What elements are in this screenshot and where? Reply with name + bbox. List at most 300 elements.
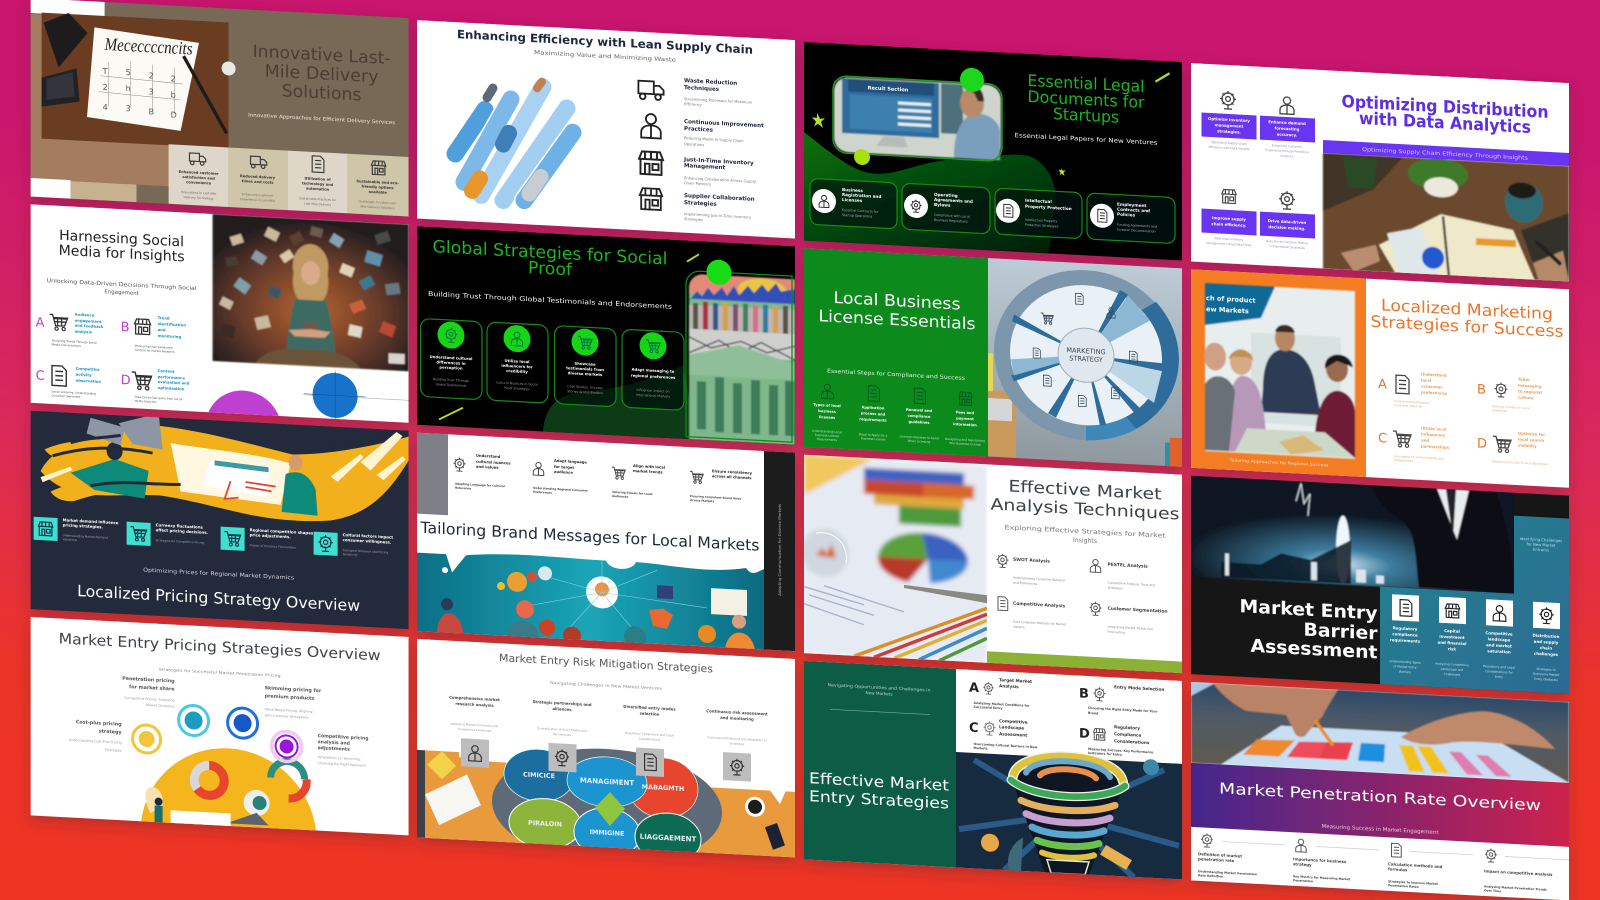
slide: Market Entry Barrier Assessment	[1191, 476, 1569, 695]
frame and green circle	[686, 258, 792, 442]
photo banner text: ch of product	[1206, 294, 1256, 305]
strategy cards: testimonials from	[566, 365, 604, 372]
teal barrier panel: and market	[1486, 642, 1512, 649]
icon tiles	[461, 738, 751, 782]
desk props	[988, 353, 1182, 467]
item C: activity	[76, 372, 92, 378]
top items: cultural nuances	[476, 460, 511, 466]
title: License Essentials	[819, 306, 975, 333]
technique items: Data Collection Methods for Market	[1013, 620, 1067, 627]
item A: Analyzing Trends Through Social	[52, 338, 97, 345]
title: Optimizing Distribution	[1342, 92, 1548, 123]
illustration: desk with overlapping circles: PIRALOIN	[528, 819, 562, 829]
just-in-time item: Enhancing Collaboration Across Supply	[684, 176, 757, 184]
strategy headings: Regulatory Compliance and Legal	[625, 731, 674, 737]
teal barrier panel: Entry	[1495, 675, 1503, 679]
teal barrier panel: and financial	[1438, 640, 1467, 646]
illustration: desk with overlapping circles	[417, 739, 795, 875]
technique items: and Preferences	[1013, 581, 1038, 586]
photo: wooden desk with handwritten note: 2	[149, 71, 154, 81]
strategy headings: Competitive Landscape	[457, 727, 492, 733]
item B: B	[121, 320, 130, 336]
item C: Landscape	[999, 724, 1024, 731]
pricing factor cards: Variations	[63, 537, 77, 542]
pricing factor cards: consumer willingness.	[343, 537, 392, 545]
green left panel	[804, 661, 956, 868]
document cards: Startup Operations	[842, 213, 873, 219]
just-in-time item: Management	[684, 163, 725, 171]
penetration pricing text	[122, 676, 175, 709]
item A: Analysis	[999, 683, 1019, 689]
item D	[122, 369, 190, 404]
slide: Localized Pricing Strategy Overview	[31, 407, 409, 630]
purple benefit cards: accuracy.	[1277, 132, 1298, 138]
item C: C	[1378, 431, 1387, 447]
strategy cards: Utilize local	[505, 358, 529, 364]
feature cards: times and costs	[242, 179, 274, 185]
item A: Consumer Behavior	[1394, 403, 1423, 409]
cost-plus text: Understanding Cost-Plus Pricing	[69, 738, 122, 745]
metric items: Understanding Market Penetration	[1198, 869, 1257, 876]
item A: Audience	[75, 312, 95, 318]
strategy cards: differences in	[436, 359, 466, 366]
illustration: target and binoculars on yellow dome	[141, 744, 317, 900]
document cards: Licenses	[842, 197, 863, 203]
item D: Indicators for Entry	[1088, 751, 1122, 757]
green left panel: When Licensing	[908, 439, 931, 444]
green left panel: Application	[862, 405, 885, 411]
title: Media for Insights	[59, 243, 185, 265]
photo banner text	[1206, 294, 1256, 316]
feature cards: Innovations in Last-Mile	[181, 190, 216, 196]
illustration: supply chain capsules	[455, 77, 573, 204]
title: Documents for	[1027, 87, 1145, 112]
photo: wooden desk with handwritten note: 2	[103, 83, 108, 92]
purple benefit cards: Drive data-driven	[1268, 218, 1306, 225]
item D: D	[1079, 726, 1090, 742]
feature cards: Sustainable Practices for	[299, 196, 337, 202]
technique items: PESTEL Analysis	[1108, 562, 1148, 570]
item D: D	[121, 373, 131, 389]
penetration pricing text: for market share	[129, 684, 175, 693]
title: Market Entry Pricing Strategies Overview	[59, 631, 381, 664]
item B: B	[1477, 382, 1486, 398]
item B: Audiences	[1492, 408, 1507, 413]
item C: Competitor	[76, 366, 100, 372]
title	[818, 287, 976, 333]
item C	[969, 717, 1038, 753]
technique items: Integrating Market Trends and	[1108, 625, 1153, 631]
title: Market Entry Risk Mitigation Strategies	[499, 652, 713, 676]
strategy headings: research analysis	[455, 701, 494, 708]
item B: to regional	[1518, 389, 1542, 395]
item A: Target Market	[999, 677, 1032, 684]
purple benefit cards: chain efficiency.	[1211, 221, 1247, 228]
penetration pricing text: Penetration pricing	[122, 676, 175, 685]
purple benefit cards	[1202, 90, 1315, 251]
right vertical strip	[764, 451, 795, 652]
title	[1370, 295, 1564, 341]
item A	[1378, 369, 1448, 410]
technique items: Understanding Consumer Behavior	[1013, 576, 1066, 582]
feature cards: technology and	[302, 181, 334, 187]
title	[1240, 596, 1378, 663]
feature cards: available	[368, 190, 387, 195]
strategy headings	[449, 695, 768, 747]
competitive pricing text: analysis and	[318, 739, 350, 747]
item B	[1477, 374, 1542, 415]
strategy cards: regional preferences	[631, 373, 676, 380]
item A: and feedback	[75, 323, 104, 329]
waste reduction item: Waste Reduction	[684, 78, 737, 87]
photo: hand marking bar chart	[1191, 682, 1569, 783]
green left panel: Common Mistakes to Avoid	[899, 434, 939, 440]
slide: Optimizing Distribution with Data Analytics	[1191, 63, 1569, 283]
title	[1029, 74, 1144, 126]
teal barrier panel: landscape	[1488, 636, 1511, 643]
slide: Localized Marketing Strategies for Success	[1191, 269, 1569, 488]
photo: wooden desk with handwritten note: h	[126, 84, 131, 93]
technique items: SWOT Analysis	[1013, 557, 1050, 565]
teal barrier panel: Overcome Market	[1533, 672, 1560, 677]
pricing factor cards: Impact of Currency Fluctuations	[250, 543, 296, 550]
subtitle: Maximizing Value and Minimizing Waste	[534, 50, 677, 64]
item C: C	[36, 369, 45, 384]
title: Local Business	[833, 288, 960, 314]
purple benefit cards: Experience through Predictive	[1265, 148, 1309, 154]
teal barrier panel: requirements	[1390, 637, 1421, 644]
title: Analysis Techniques	[990, 494, 1180, 523]
top items	[454, 453, 753, 505]
feature cards: Challenges in Urban Last-	[358, 199, 397, 205]
photo: woman surrounded by social images	[213, 214, 409, 371]
teal barrier panel: Identifying Challenges	[1520, 536, 1562, 543]
green left panel: compliance	[908, 414, 931, 419]
green left panel: requirements	[859, 417, 887, 423]
photo banner text: ew Markets	[1206, 305, 1249, 315]
supplier collaboration item: Strategies	[684, 200, 717, 208]
item C: Competitive	[999, 718, 1028, 725]
photo: financial charts with crystal ball and pen	[801, 454, 987, 663]
strategy cards: Building Trust Through	[433, 377, 469, 383]
title: Mile Delivery	[265, 61, 379, 87]
illustration: megaphone and analysts on yellow brush	[41, 407, 409, 527]
green left panel: information	[953, 422, 977, 427]
feature cards: convenience	[186, 180, 212, 186]
document cards: Operating	[934, 192, 958, 198]
pricing factor cards: price adjustments.	[250, 532, 291, 539]
subtitle: Essential Legal Papers for New Ventures	[1014, 132, 1158, 147]
item C	[36, 364, 101, 400]
green left panel: Understanding Local	[812, 429, 842, 434]
item A: analysis	[75, 329, 93, 335]
green left panel: Steps to Apply for a	[859, 432, 888, 438]
green left panel: licenses	[819, 415, 835, 420]
item D: performance	[158, 374, 185, 380]
photo: wooden desk with handwritten note: Mececcccncits	[104, 34, 193, 59]
item C: Leveraging Local Partnerships and	[1394, 454, 1444, 461]
item D: visibility	[1518, 443, 1537, 449]
feature cards	[169, 144, 409, 217]
top items: for target	[554, 465, 574, 470]
monitor caption: Recuit Section	[868, 85, 909, 94]
item D: Compliance	[1114, 731, 1141, 738]
pricing factor cards: Regional competition shapes	[250, 527, 314, 536]
illustration: desk with overlapping circles: MABAGMTH	[642, 783, 684, 793]
title: Market Entry	[1240, 596, 1378, 624]
item B: Content for Market Research	[135, 348, 175, 354]
strategy headings: Diversification of Entry Modes and	[537, 726, 587, 733]
green left panel: payment	[956, 416, 974, 421]
skimming pricing text	[265, 685, 322, 720]
green left panel: guidelines	[909, 420, 929, 425]
technique items: Strategies	[1108, 586, 1123, 590]
metric items: Calculation methods and	[1388, 861, 1443, 869]
photo: wooden desk with handwritten note: 5	[126, 68, 131, 77]
slide: Effective Market Entry Strategies	[804, 661, 1182, 880]
competitive pricing text: Choosing the Right Approach	[318, 761, 366, 768]
item D: Media Analytics	[135, 399, 157, 404]
item C: Social Listening: Understanding	[52, 389, 96, 396]
slide: Market Entry Pricing Strategies Overview	[31, 617, 409, 900]
pricing factor cards: Cultural factors impact	[343, 532, 393, 540]
strategy cards: Showcase	[574, 361, 596, 367]
item D: Content	[158, 368, 175, 374]
document cards: Investor Documentation	[1117, 228, 1156, 234]
gradient title band: Measuring Success in Market Engagement	[1322, 824, 1438, 836]
title: Solutions	[282, 81, 362, 106]
cost-plus text: Strategies	[105, 748, 122, 753]
pricing factor cards: Currency fluctuations	[156, 522, 203, 530]
decorative stars	[812, 72, 1170, 176]
technique items: Competitive Analysis	[1013, 601, 1065, 609]
technique items: Forecasting	[1108, 630, 1125, 635]
green left panel: Types of local	[813, 403, 841, 408]
strategy headings: Comprehensive market	[449, 695, 500, 702]
skimming pricing text: Skimming pricing for	[265, 685, 322, 694]
top items: Tailoring Visuals for Local	[612, 490, 653, 496]
feature cards: Delivery Technology	[184, 195, 214, 201]
pricing factor cards: Market demand influence	[63, 517, 119, 525]
top items: Audiences	[612, 494, 629, 499]
item C: and	[1421, 437, 1429, 443]
teal barrier panel: Regulatory	[1393, 625, 1418, 632]
document cards: Essential Contracts for	[842, 208, 879, 214]
strategy cards: Cultural Nuances in Social	[496, 380, 538, 387]
document cards: Bylaws	[934, 202, 951, 208]
continuous improvement item: Operations	[684, 142, 704, 147]
photo: wooden desk with handwritten note: 3	[149, 87, 154, 97]
illustration: desk with overlapping circles: LIAGGAEMENT	[640, 833, 696, 844]
feature cards: friendly options	[362, 185, 394, 190]
title	[60, 230, 184, 263]
item D: Considerations	[1114, 738, 1150, 745]
item B: culture	[1518, 395, 1534, 400]
waste reduction item: Streamlining Processes for Maximum	[684, 97, 753, 105]
illustration: rainbow funnel	[956, 749, 1182, 880]
waste reduction item	[638, 78, 752, 107]
item A: Successful Entry	[974, 705, 1002, 710]
item B	[1079, 682, 1164, 719]
just-in-time item	[639, 151, 757, 189]
title: Assessment	[1250, 636, 1378, 663]
supplier collaboration item	[640, 188, 755, 225]
item A: consumer	[1421, 383, 1443, 390]
item D: local search	[1518, 437, 1544, 443]
subtitle	[47, 278, 196, 296]
item B: B	[1079, 686, 1089, 702]
strategy headings: Continuous Monitoring and Adaptation of	[707, 735, 768, 742]
teal barrier panel: and supply	[1534, 639, 1559, 645]
metric items: Importance for business	[1293, 856, 1347, 864]
title: Essential Legal	[1027, 71, 1144, 96]
strategy rings	[133, 702, 302, 762]
item A: A	[1378, 377, 1387, 393]
continuous improvement item: Practices	[684, 126, 714, 134]
document cards	[810, 178, 1175, 244]
strategy headings: Continuous risk assessment	[706, 708, 768, 716]
feature cards: Last-Mile Delivery	[304, 201, 331, 207]
photo: team around map	[1204, 283, 1355, 459]
teal barrier panel: Barriers	[1399, 670, 1411, 674]
feature cards: Enhanced customer	[179, 170, 219, 176]
subtitle: Optimizing Prices for Regional Market Dynamics	[143, 568, 294, 582]
panel caption: Tailoring Approaches for Regional Success	[1228, 457, 1328, 468]
strategy cards: Adapt messaging to	[632, 367, 675, 374]
green left panel: Your Business License	[949, 441, 981, 447]
strategy headings: selection	[640, 711, 660, 717]
decorative circles	[208, 370, 408, 419]
teal barrier panel: Capital	[1444, 628, 1461, 634]
item B: Monitoring User-Generated	[135, 344, 173, 350]
teal barrier panel: Distribution	[1533, 633, 1560, 639]
item C: observation	[76, 378, 101, 384]
title	[990, 475, 1180, 523]
penetration pricing text: Competitive Pricing: Analyzing	[124, 696, 175, 703]
feature cards: Enhancing Customer	[242, 192, 274, 198]
continuous improvement item: Continuous Improvement	[684, 119, 764, 129]
item A	[969, 676, 1032, 712]
title: Harnessing Social	[59, 228, 184, 250]
illustration: desk with overlapping circles: CIMICICE	[523, 771, 555, 780]
item C: Assessment	[999, 731, 1027, 738]
green left panel: Business License	[815, 433, 839, 438]
teal barrier panel: for New Market	[1527, 541, 1556, 548]
metric items: strategy	[1293, 861, 1312, 867]
purple benefit cards: in Distribution Strategies	[1269, 244, 1306, 250]
teal barrier panel: Strategies to	[1536, 667, 1556, 672]
waste reduction item: Techniques	[684, 85, 720, 93]
title	[809, 769, 949, 813]
top items: audience	[554, 470, 573, 475]
subtitle: Strategies for Successful Market Penetration Pricing	[159, 667, 281, 678]
metric items: Key Metrics for Measuring Market	[1293, 874, 1351, 881]
feature cards: Utilization of	[305, 176, 331, 182]
teal barrier panel: saturation	[1487, 648, 1511, 655]
skimming pricing text: premium products	[265, 693, 314, 702]
strategy cards: influencers for	[501, 363, 533, 369]
cost-plus text: Cost-plus pricing	[76, 719, 122, 728]
item A: Understanding Regional	[1394, 399, 1429, 405]
item B: Tailoring Content for Local	[1491, 404, 1530, 410]
metric items: Penetration Rates	[1388, 883, 1419, 889]
item D: Measuring Success of Local Strategies	[1492, 459, 1548, 466]
title: Localized Marketing	[1381, 295, 1553, 323]
teal barrier panel: Entry Obstacles	[1534, 677, 1558, 682]
strategy cards: perception	[439, 364, 463, 371]
right vertical strip: Adapting Communication for Diverse Markets	[777, 504, 782, 596]
top items: and values	[476, 465, 499, 470]
subtitle band	[1323, 140, 1569, 166]
slide: Effective Market Analysis Techniques	[801, 454, 1182, 674]
title: Localized Pricing Strategy Overview	[77, 582, 360, 615]
metric items: Analyzing Market Penetration Trends	[1484, 884, 1547, 892]
metric items: Strategies to Improve Market	[1388, 879, 1439, 886]
subtitle band: Optimizing Supply Chain Efficiency Through Insights	[1362, 147, 1528, 162]
teal barrier panel: Entrants	[1533, 547, 1549, 553]
teal barrier panel: challenges	[1534, 651, 1559, 657]
competitive pricing text: adjustments	[318, 745, 350, 753]
purple benefit cards: Optimize inventory	[1208, 116, 1250, 123]
item A: A	[969, 681, 979, 696]
purple benefit cards: strategies.	[1217, 128, 1241, 135]
green left panel: Requirements	[817, 437, 838, 442]
feature cards: Experience in Last-Mile	[240, 197, 275, 203]
item B: and	[158, 327, 166, 332]
item A: A	[36, 316, 45, 331]
supplier collaboration item: Supplier Collaboration	[684, 193, 755, 203]
teal barrier panel: Landscape and	[1441, 667, 1463, 672]
teal barrier panel: of Market Entry	[1393, 664, 1417, 670]
pricing factor cards: affect pricing decisions.	[156, 527, 209, 535]
green left panel: Essential Steps for Compliance and Success	[827, 369, 965, 382]
item A: Analyzing Market Conditions for	[974, 701, 1030, 708]
teal barrier panel: Analyzing Competitive	[1435, 662, 1469, 667]
top items: Understand	[476, 454, 501, 459]
document cards: Contracts and	[1117, 207, 1150, 213]
feature cards: Sustainable and eco-	[356, 179, 399, 186]
item C: Markets	[974, 746, 988, 751]
teal barrier panel: Considerations for	[1485, 669, 1513, 675]
strategy cards	[420, 318, 684, 410]
top items: Adapt language	[554, 459, 587, 465]
document cards: Employment	[1117, 202, 1146, 208]
item C: influencers	[1421, 431, 1446, 438]
marketing strategy wheel: MARKETING	[1066, 346, 1106, 356]
subtitle: Insights	[1073, 537, 1097, 545]
title: Strategies for Success	[1370, 312, 1564, 341]
just-in-time item: Just-In-Time Inventory	[683, 157, 754, 167]
item A: local	[1421, 377, 1431, 383]
orange left panel	[1191, 269, 1366, 478]
green left panel: Renewal and	[906, 408, 932, 413]
photo: businessman and glowing skyline	[1191, 476, 1569, 597]
teal barrier panel: chain	[1540, 645, 1552, 651]
subtitle: Navigating Challenges in New Market Ventures	[550, 680, 662, 691]
slide: Harnessing Social Media for Insights	[24, 204, 419, 431]
item D	[1079, 722, 1153, 758]
document cards: Registration and	[842, 192, 881, 199]
cost-plus text: strategy	[99, 729, 122, 736]
feature cards: satisfaction and	[182, 175, 215, 181]
strategy headings: Strategies	[730, 741, 745, 746]
supplier collaboration item: Strategies	[684, 217, 703, 222]
title: Tailoring Brand Messages for Local Markets	[419, 519, 759, 555]
top items: Align with local	[633, 464, 665, 470]
metric items: Over Time	[1484, 888, 1501, 893]
purple benefit cards: Management Using Data Flows	[1207, 241, 1252, 247]
item C: partnerships	[1421, 443, 1450, 450]
